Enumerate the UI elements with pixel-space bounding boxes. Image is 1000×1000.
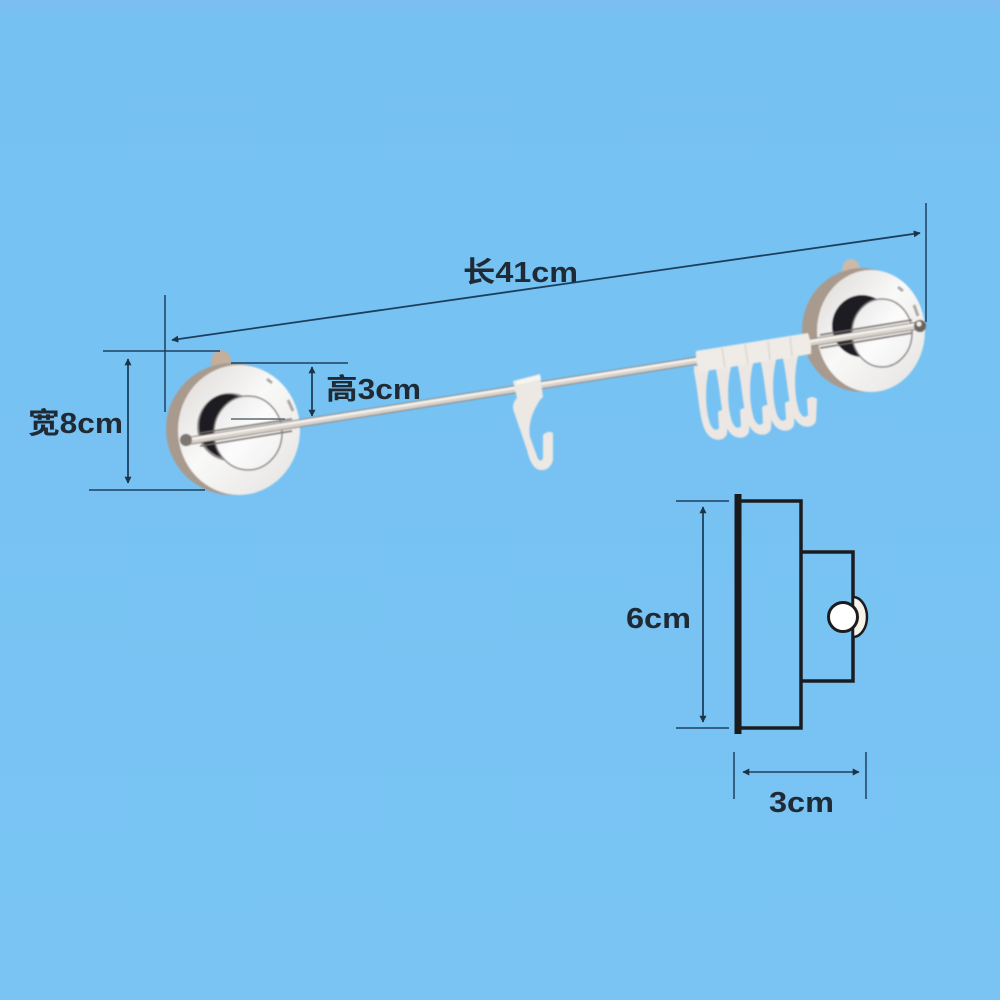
side depth dimension: 3cm: [734, 752, 866, 819]
five-hook slider: [694, 333, 817, 440]
left suction cup: [166, 350, 300, 495]
label: 6cm: 6cm: [626, 603, 691, 635]
slider sleeve: [696, 333, 811, 372]
side height dimension: 6cm: [626, 501, 729, 728]
hook 5: [783, 353, 817, 427]
label: length: 长41cm: [463, 256, 578, 289]
width dimension: 8cm: [28, 351, 220, 490]
hook 1: [694, 366, 728, 440]
hook 4: [761, 357, 795, 431]
label: 3cm: 3cm: [769, 787, 834, 819]
label: width: 宽8cm: [28, 407, 123, 440]
right suction cup: [802, 259, 925, 392]
towel rod: [180, 320, 926, 446]
label: height: 高3cm: [326, 373, 421, 406]
side view diagram: [738, 494, 867, 734]
length dimension: 41cm: [165, 203, 926, 412]
single hook: [513, 374, 553, 470]
hook 2: [716, 364, 750, 438]
hook 3: [738, 361, 772, 435]
